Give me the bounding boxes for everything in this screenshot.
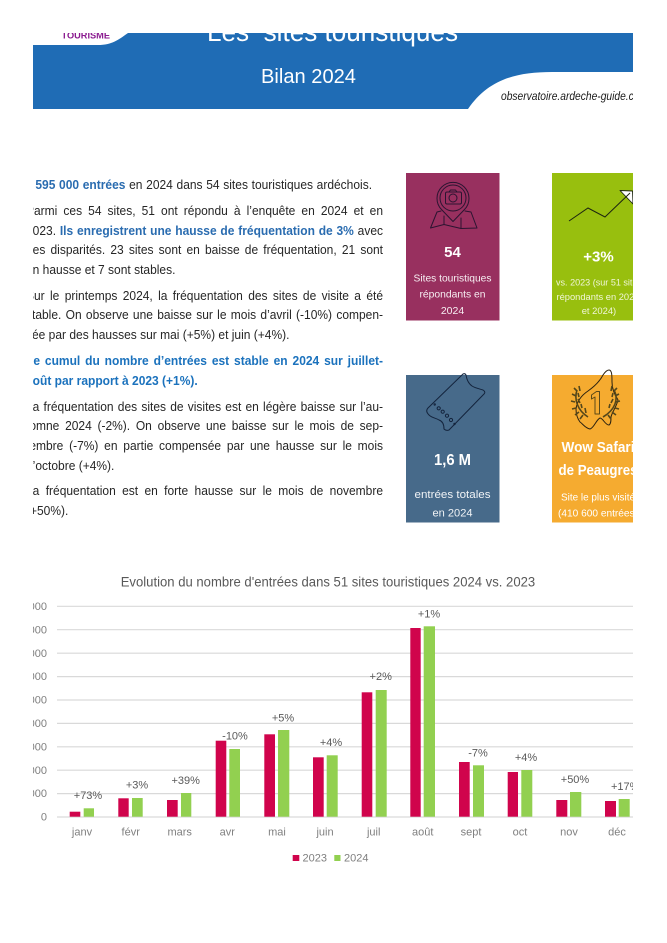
y axis labels: 250 000 xyxy=(7,695,47,707)
subtitle: Bilan 2024 xyxy=(261,66,356,88)
month labels xyxy=(72,828,626,838)
percentage labels: +1% xyxy=(418,609,440,621)
month labels: janv xyxy=(71,826,93,838)
value: 54 xyxy=(444,244,461,261)
icon: camera pin on map xyxy=(430,182,477,228)
y axis labels: 0 xyxy=(41,812,47,824)
paragraph: summer highlight: Le cumul du nombre d’entrées est stable en 2024 sur juillet- xyxy=(33,354,383,368)
bar chart xyxy=(7,575,640,865)
caption: répondants en 2023 xyxy=(556,292,640,303)
paragraph: respondents: Parmi ces 54 sites, 51 ont répondu à l’enquête en 2024 et en xyxy=(33,204,383,218)
caption: Sites touristiques xyxy=(414,273,492,285)
caption: et 2024) xyxy=(582,306,616,317)
month labels: août xyxy=(412,826,433,838)
y axis labels xyxy=(33,602,47,820)
icon: ticket xyxy=(427,374,485,430)
header banner xyxy=(33,33,633,109)
paragraph: summer highlight xyxy=(33,354,383,388)
month labels: mai xyxy=(268,826,286,838)
banner background xyxy=(33,33,633,109)
percentage labels: +5% xyxy=(272,713,294,725)
value: +3% xyxy=(583,249,614,266)
paragraph: respondents xyxy=(33,204,383,277)
y axis labels: 150 000 xyxy=(7,741,47,753)
percentage labels xyxy=(74,609,640,802)
caption xyxy=(556,279,633,316)
month labels: oct xyxy=(513,826,527,838)
paragraph: respondents: 2023. Ils enregistrent une hausse de fréquentation de 3% avec xyxy=(33,224,383,238)
month labels: nov xyxy=(560,826,578,838)
panel: 54 sites xyxy=(406,173,500,320)
site name: de Peaugres xyxy=(558,462,638,479)
month labels: févr xyxy=(122,826,140,838)
caption xyxy=(558,493,633,518)
y axis labels: 350 000 xyxy=(7,648,47,660)
caption: entrées totales xyxy=(414,489,491,501)
site name xyxy=(559,441,633,478)
bars 2023 xyxy=(70,628,616,817)
paragraph: autumn xyxy=(33,400,383,473)
value: 1,6 M xyxy=(434,452,471,469)
y axis labels: 50 000 xyxy=(13,788,47,800)
icon: rising trend arrow xyxy=(569,190,633,221)
panel: Wow Safari xyxy=(552,370,638,522)
icon: Ardèche outline with laurel and number one xyxy=(571,370,620,429)
paragraph: autumn: tomne 2024 (-2%). On observe une baisse sur le mois de sep- xyxy=(33,419,383,433)
caption: en 2024 xyxy=(432,508,472,520)
month labels: juin xyxy=(315,826,334,838)
y axis labels: 450 000 xyxy=(7,601,47,613)
caption: Site le plus visité xyxy=(561,492,635,504)
percentage labels: +50% xyxy=(561,774,589,786)
paragraph: autumn: tembre (-7%) en partie compensée par une hausse sur le mois xyxy=(33,439,383,453)
paragraph: autumn: La fréquentation des sites de visites est en légère baisse sur l’au- xyxy=(33,400,383,414)
title: Les sites touristiques xyxy=(207,17,458,47)
percentage labels: +17% xyxy=(611,781,640,793)
legend xyxy=(292,854,368,862)
panel: +3% xyxy=(552,173,633,320)
caption xyxy=(415,490,490,516)
legend: 2024 xyxy=(344,853,368,865)
percentage labels: +73% xyxy=(74,790,102,802)
month labels: sept xyxy=(461,826,481,838)
percentage labels: +3% xyxy=(126,780,148,792)
y axis labels: 300 000 xyxy=(7,671,47,683)
percentage labels: -7% xyxy=(468,748,488,760)
percentage labels: +4% xyxy=(515,752,537,764)
chart title: Evolution du nombre d'entrées dans 51 sites touristiques 2024 vs. 2023 xyxy=(121,575,535,590)
month labels: avr xyxy=(220,826,235,838)
caption: (410 600 entrées) xyxy=(558,508,638,520)
caption: vs. 2023 (sur 51 sites xyxy=(556,278,642,289)
site name: Wow Safari xyxy=(562,439,634,456)
y axis labels: 400 000 xyxy=(7,624,47,636)
website url: observatoire.ardeche-guide.com xyxy=(501,91,648,103)
y axis labels: 200 000 xyxy=(7,718,47,730)
month labels: mars xyxy=(167,826,192,838)
caption xyxy=(414,274,492,314)
paragraph: spring: sée par des hausses sur mai (+5%) et juin (+4%). xyxy=(33,328,289,342)
paragraph: spring xyxy=(33,289,383,342)
y axis labels: 100 000 xyxy=(7,765,47,777)
paragraph: november: La fréquentation est en forte hausse sur le mois de novembre xyxy=(33,484,383,498)
percentage labels: -10% xyxy=(222,730,248,742)
body text xyxy=(33,178,383,518)
month labels: juil xyxy=(366,826,380,838)
percentage labels: +4% xyxy=(320,737,342,749)
month labels: déc xyxy=(608,826,626,838)
paragraph: respondents: des disparités. 23 sites sont en baisse de fréquentation, 21 sont xyxy=(33,243,383,257)
logo text: TOURISME xyxy=(62,30,110,40)
panel: 1,6 M xyxy=(406,374,500,522)
paragraph: november xyxy=(33,484,383,518)
caption: 2024 xyxy=(441,305,464,317)
percentage labels: +2% xyxy=(370,671,392,683)
bars 2024 xyxy=(84,626,630,817)
legend: 2023 xyxy=(302,853,327,865)
caption: répondants en xyxy=(420,289,486,301)
paragraph: spring: Sur le printemps 2024, la fréquentation des sites de visite a été xyxy=(33,289,383,303)
paragraph: spring: stable. On observe une baisse sur le mois d’avril (-10%) compen- xyxy=(33,308,383,322)
paragraph: total entries: 1 595 000 entrées en 2024 dans 54 sites touristiques ardéchois. xyxy=(33,178,372,192)
percentage labels: +39% xyxy=(171,775,200,787)
